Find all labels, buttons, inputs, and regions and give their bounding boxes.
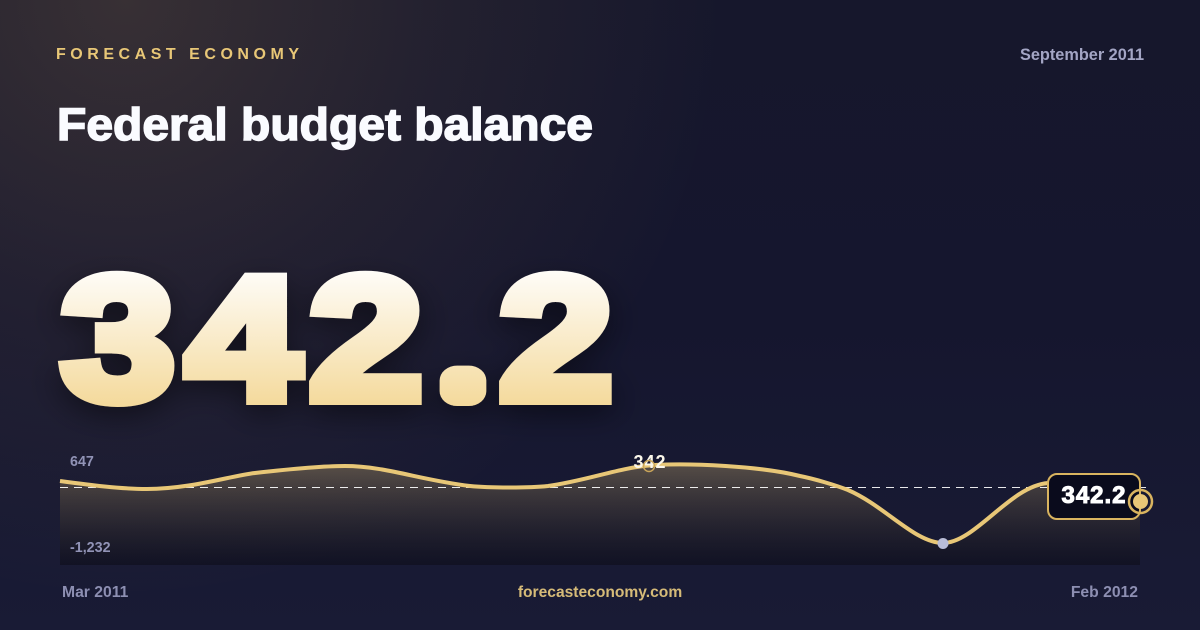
y max label: 647: [70, 454, 94, 470]
big value: 3: [61, 242, 175, 437]
big value: 2: [499, 242, 613, 437]
source url: forecasteconomy.com: [518, 584, 682, 601]
big value: 4: [186, 242, 300, 437]
low marker: [938, 538, 948, 549]
big value: .: [452, 329, 474, 407]
date: September 2011: [1020, 46, 1144, 64]
big value: 2: [309, 242, 423, 437]
brand eyebrow: FORECAST ECONOMY: [56, 46, 299, 63]
mid marker: [644, 460, 654, 472]
y min label: -1,232: [70, 540, 111, 556]
end marker: [1129, 490, 1152, 513]
current value callout: [1048, 474, 1140, 519]
end date: Feb 2012: [1071, 584, 1138, 601]
current value callout: 342.2: [1061, 482, 1127, 509]
title: Federal budget balance: [57, 99, 593, 150]
start date: Mar 2011: [62, 584, 129, 601]
mid value label: 342: [633, 452, 667, 472]
average dashed line: [60, 486, 1146, 488]
area under line: [60, 464, 1140, 565]
chart: [60, 452, 1152, 565]
data line: [60, 464, 1140, 543]
